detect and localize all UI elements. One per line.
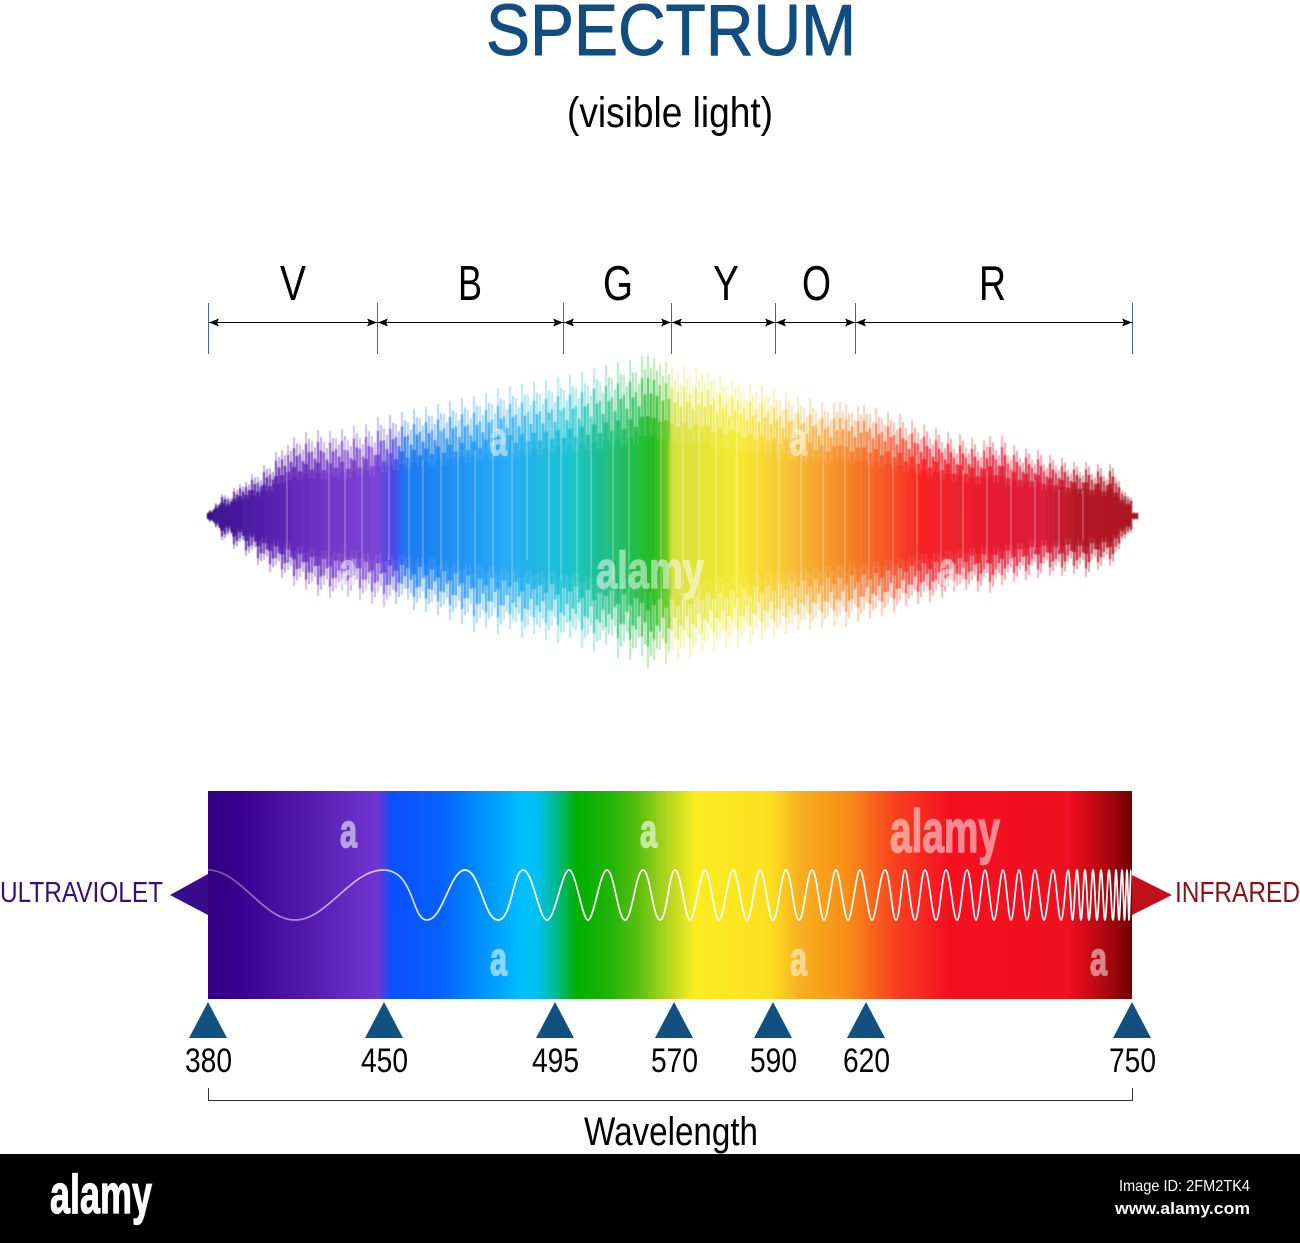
- colour letters: [280, 257, 1006, 311]
- colour letters: O: [802, 257, 831, 311]
- waveform streaks: [287, 380, 1083, 640]
- band watermarks: [340, 798, 1108, 985]
- wavelength numbers: 620: [843, 1042, 890, 1080]
- colour letters: V: [280, 257, 306, 311]
- footer url: www.alamy.com: [1114, 1199, 1250, 1218]
- colour letters: G: [603, 257, 633, 311]
- colour letters: B: [458, 257, 482, 311]
- image id: Image ID: 2FM2TK4: [1119, 1178, 1250, 1195]
- waveform watermarks: alamy: [596, 542, 704, 600]
- wavelength label: Wavelength: [584, 1110, 758, 1154]
- wavelength numbers: 590: [750, 1042, 797, 1080]
- spectrum waveform: [210, 355, 1137, 668]
- footer logo: alamy: [50, 1163, 152, 1225]
- band watermarks: a: [340, 804, 358, 857]
- colour letters: R: [979, 257, 1006, 311]
- marker triangles: [189, 1002, 1151, 1038]
- light wave: [208, 870, 1131, 920]
- wavelength bracket: [208, 1088, 1132, 1100]
- spectrum colour band: [208, 791, 1132, 999]
- band watermarks: a: [1090, 932, 1108, 985]
- wavelength numbers: 570: [651, 1042, 698, 1080]
- wavelength numbers: 450: [361, 1042, 408, 1080]
- band watermarks: a: [490, 932, 508, 985]
- range arrows: [209, 318, 1132, 326]
- waveform watermarks: a: [340, 543, 357, 596]
- colour letters: Y: [713, 257, 739, 311]
- footer bar: [0, 1154, 1300, 1243]
- waveform watermarks: a: [939, 542, 957, 595]
- waveform watermarks: a: [790, 412, 808, 465]
- waveform watermarks: [340, 412, 957, 600]
- wavelength numbers: 750: [1109, 1042, 1156, 1080]
- wavelength markers: [185, 1002, 1156, 1080]
- waveform watermarks: a: [490, 412, 508, 465]
- wavelength numbers: [185, 1042, 1156, 1080]
- infrared arrow: [1132, 875, 1172, 915]
- subtitle: (visible light): [567, 89, 773, 137]
- wavelength numbers: 495: [532, 1042, 579, 1080]
- band watermarks: alamy: [890, 798, 1000, 865]
- band watermarks: a: [790, 932, 808, 985]
- colour range brackets: [208, 257, 1132, 354]
- ultraviolet arrow: [170, 874, 208, 915]
- wavelength numbers: 380: [185, 1042, 232, 1080]
- ultraviolet label: ULTRAVIOLET: [0, 877, 163, 909]
- band watermarks: a: [640, 804, 658, 857]
